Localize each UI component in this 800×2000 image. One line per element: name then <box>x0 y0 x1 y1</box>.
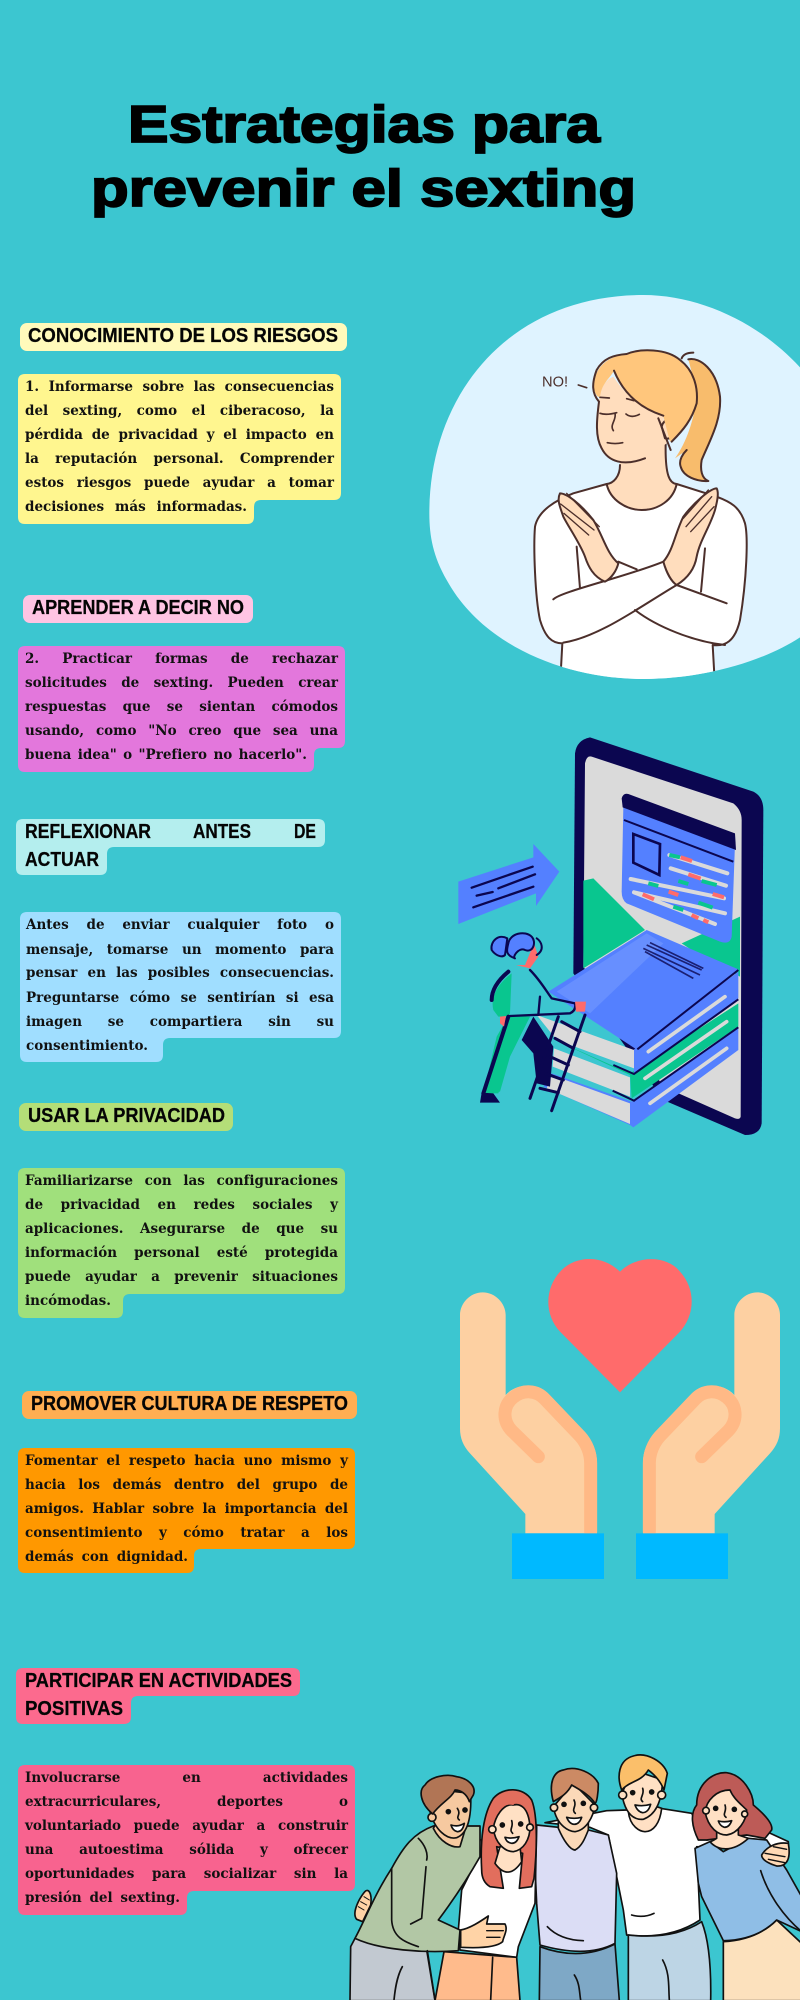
person five <box>692 1773 800 2000</box>
panel: participar en actividades positivas text <box>18 1765 355 1915</box>
panel: reflexionar text: imagen se compartiera sin su <box>26 1014 334 1030</box>
panel: conocimiento de los riesgos text: pérdida de privacidad y el impacto en <box>25 427 334 443</box>
heading: reflexionar antes de actuar: DE <box>294 821 316 843</box>
panel: usar la privacidad text: información personal esté protegida <box>25 1245 338 1261</box>
panel: promover cultura de respeto text: Fomentar el respeto hacia uno mismo y <box>25 1453 348 1469</box>
title: Estrategias para <box>128 96 601 154</box>
heading: promover cultura de respeto: PROMOVER CULTURA DE RESPETO <box>31 1393 348 1415</box>
panel: participar en actividades positivas text: una autoestima sólida y ofrecer <box>25 1842 348 1858</box>
person three <box>535 1769 619 2000</box>
panel: conocimiento de los riesgos text: decisiones más informadas. <box>25 499 247 515</box>
icon: right hand <box>636 1292 780 1579</box>
illustration: woman saying no: NO! <box>542 375 568 391</box>
panel: conocimiento de los riesgos text: del sexting, como el ciberacoso, la <box>25 403 334 419</box>
heading: usar la privacidad: USAR LA PRIVACIDAD <box>28 1105 225 1127</box>
panel: conocimiento de los riesgos text: la reputación personal. Comprender <box>25 451 334 467</box>
panel: usar la privacidad text: Familiarizarse con las configuraciones <box>25 1173 338 1189</box>
person four <box>545 1755 788 2000</box>
person on ladder <box>480 933 586 1111</box>
illustration: woman saying no <box>429 295 800 679</box>
heading: participar en actividades positivas <box>16 1668 300 1724</box>
heading: reflexionar antes de actuar: ACTUAR <box>25 849 99 871</box>
icon: tablet <box>573 737 763 1135</box>
heading: reflexionar antes de actuar: ANTES <box>193 821 251 843</box>
panel: aprender a decir no text <box>18 646 345 772</box>
illustration: group of friends <box>349 1754 800 2000</box>
illustration: person climbing books in front of a tablet <box>458 737 764 1135</box>
panel: reflexionar text <box>20 912 341 1062</box>
heading: conocimiento de los riesgos: CONOCIMIENTO DE LOS RIESGOS <box>28 325 338 347</box>
panel: participar en actividades positivas text: Involucrarse en actividades <box>25 1770 348 1786</box>
panel: usar la privacidad text: puede ayudar a prevenir situaciones <box>25 1269 338 1285</box>
panel: reflexionar text: Antes de enviar cualquier foto o <box>26 917 334 933</box>
panel: participar en actividades positivas text: extracurriculares, deportes o <box>25 1794 348 1810</box>
panel: reflexionar text: Preguntarse cómo se sentirían si esa <box>26 990 334 1006</box>
panel: usar la privacidad text: aplicaciones. Asegurarse de que su <box>25 1221 338 1237</box>
heading: aprender a decir no: APRENDER A DECIR NO <box>32 597 244 619</box>
panel: participar en actividades positivas text: presión del sexting. <box>25 1890 180 1906</box>
panel: reflexionar text: consentimiento. <box>26 1038 148 1054</box>
heading: reflexionar antes de actuar: REFLEXIONAR <box>25 821 151 843</box>
panel: reflexionar text: pensar en las posibles consecuencias. <box>26 965 334 981</box>
person two <box>435 1790 537 2000</box>
panel: promover cultura de respeto text: hacia los demás dentro del grupo de <box>25 1477 348 1493</box>
panel: aprender a decir no text: solicitudes de sexting. Pueden crear <box>25 675 338 691</box>
title <box>91 96 636 218</box>
panel: aprender a decir no text: respuestas que se sientan cómodos <box>25 699 338 715</box>
heading: participar en actividades positivas: PARTICIPAR EN ACTIVIDADES <box>25 1670 292 1692</box>
panel: promover cultura de respeto text <box>18 1448 355 1573</box>
panel: conocimiento de los riesgos text: 1. Informarse sobre las consecuencias <box>25 379 334 395</box>
window with bars <box>622 794 736 943</box>
icon: left hand <box>460 1292 604 1579</box>
panel: participar en actividades positivas text: voluntariado puede ayudar a construir <box>25 1818 348 1834</box>
panel: usar la privacidad text: incómodas. <box>25 1293 111 1309</box>
heading: reflexionar antes de actuar <box>16 819 325 875</box>
icon: heart <box>548 1259 692 1392</box>
panel: promover cultura de respeto text: amigos. Hablar sobre la importancia del <box>25 1501 348 1517</box>
panel: aprender a decir no text: 2. Practicar formas de rechazar <box>25 651 338 667</box>
title: prevenir el sexting <box>91 160 636 218</box>
person one <box>350 1775 506 2000</box>
illustration: hands holding heart <box>460 1259 780 1579</box>
panel: conocimiento de los riesgos text <box>18 374 341 524</box>
panel: conocimiento de los riesgos text: estos riesgos puede ayudar a tomar <box>25 475 334 491</box>
panel: aprender a decir no text: usando, como "No creo que sea una <box>25 723 338 739</box>
panel: participar en actividades positivas text: oportunidades para socializar sin la <box>25 1866 348 1882</box>
panel: usar la privacidad text: de privacidad en redes sociales y <box>25 1197 338 1213</box>
panel: usar la privacidad text <box>18 1168 345 1318</box>
books <box>537 930 738 1127</box>
panel: aprender a decir no text: buena idea" o "Prefiero no hacerlo". <box>25 747 307 763</box>
panel: promover cultura de respeto text: consentimiento y cómo tratar a los <box>25 1525 348 1541</box>
icon: arrow with text lines <box>458 844 559 924</box>
heading: participar en actividades positivas: POSITIVAS <box>25 1698 123 1720</box>
panel: promover cultura de respeto text: demás con dignidad. <box>25 1549 188 1565</box>
panel: reflexionar text: mensaje, tomarse un momento para <box>26 942 334 958</box>
